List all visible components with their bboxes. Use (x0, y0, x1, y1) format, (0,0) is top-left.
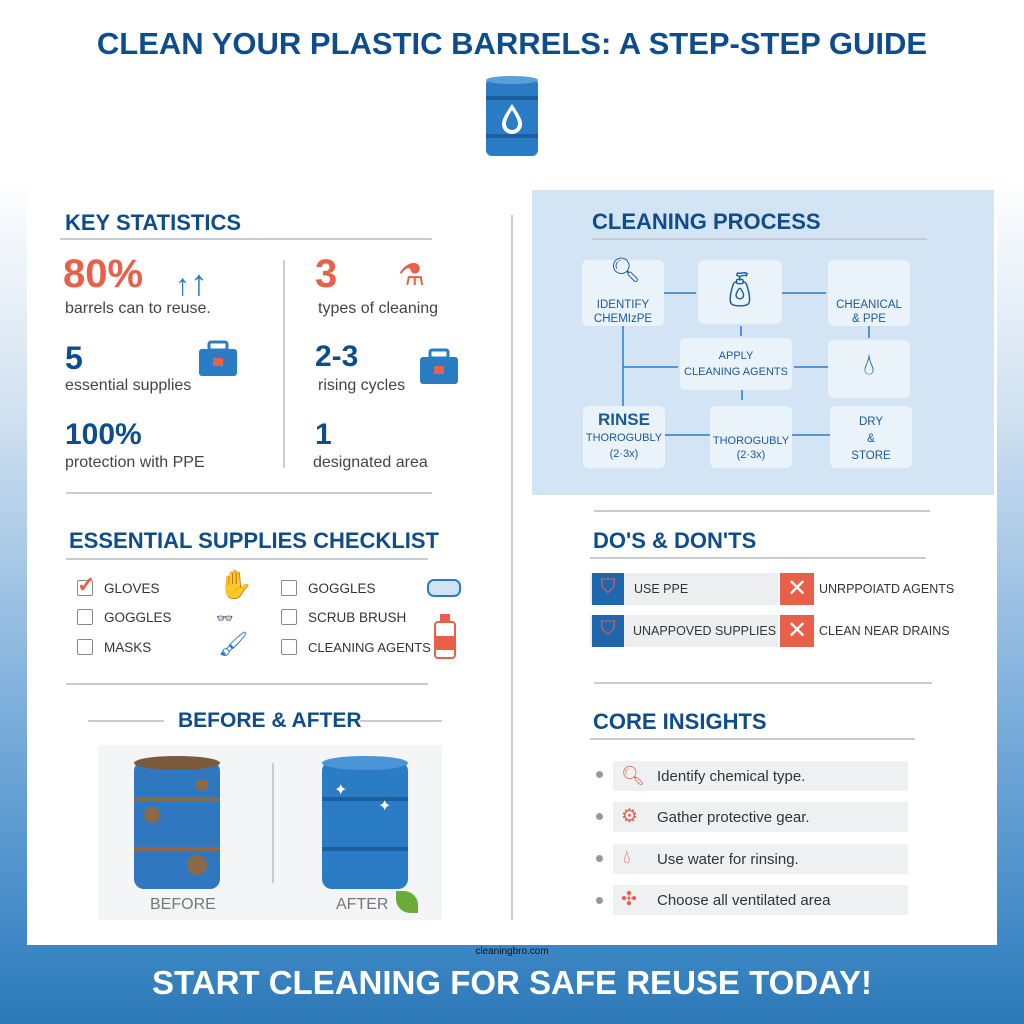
text: Use water for rinsing. (657, 851, 799, 868)
panel: key statistics (60, 210, 458, 471)
main card (27, 187, 997, 945)
panel: before & after (88, 709, 442, 920)
panel: cleaning process: CHEANICAL (836, 299, 902, 311)
panel: key statistics: 100% (65, 418, 142, 451)
icon: toolbox (199, 340, 237, 376)
panel: essential supplies checklist: SCRUB BRUSH (308, 610, 406, 625)
panel: essential supplies checklist: GLOVES (104, 581, 160, 596)
panel: cleaning process: DRY (859, 416, 883, 428)
panel: cleaning process: STORE (851, 450, 891, 462)
panel: before & after: ✦ (378, 798, 391, 815)
panel: cleaning process: 🧴︎ (718, 271, 762, 309)
panel: cleaning process: CLEANING PROCESS (592, 209, 821, 234)
panel: cleaning process: CLEANING AGENTS (684, 366, 788, 378)
panel: cleaning process: & PPE (852, 313, 886, 325)
panel: cleaning process: (2·3x) (610, 448, 638, 460)
panel: key statistics: 5 (65, 340, 83, 376)
text: ✣ (621, 889, 637, 910)
panel: cleaning process: THOROGUBLY (713, 435, 789, 447)
panel: key statistics: 1 (315, 418, 332, 451)
panel: cleaning process: THOROGUBLY (586, 432, 662, 444)
text: 💧︎ (623, 847, 631, 868)
arrows (622, 292, 870, 436)
panel: do's & don'ts: CLEAN NEAR DRAINS (819, 624, 950, 638)
panel: key statistics: ⚗ (398, 259, 425, 292)
panel: cleaning process: IDENTIFY (597, 299, 649, 311)
panel: cleaning process (582, 209, 927, 468)
panel: cleaning process: CHEMIzPE (594, 313, 652, 325)
panel: before & after: AFTER (336, 896, 388, 913)
panel: essential supplies checklist: GOGGLES (308, 581, 376, 596)
panel: essential supplies checklist: 👓 (216, 610, 233, 626)
panel: cleaning process: 🔍︎ (610, 257, 640, 284)
panel: cleaning process: & (867, 433, 875, 445)
text: Identify chemical type. (657, 768, 805, 785)
text: ⚙ (621, 806, 638, 827)
panel: key statistics: protection with PPE (65, 454, 205, 471)
panel: essential supplies checklist: GOGGLES (104, 610, 172, 625)
panel: essential supplies checklist: ✋ (218, 569, 253, 600)
panel: do's & don'ts: ⛉ (600, 576, 616, 598)
panel: do's & don'ts: UNAPPOVED SUPPLIES (633, 624, 776, 638)
panel: key statistics: KEY STATISTICS (65, 210, 241, 235)
panel: cleaning process: APPLY (719, 350, 753, 362)
panel: key statistics: 2-3 (315, 340, 358, 373)
panel: essential supplies checklist (66, 528, 461, 659)
panel: key statistics: designated area (313, 454, 428, 471)
panel: key statistics: types of cleaning (318, 300, 438, 317)
panel: do's & don'ts: UNRPPOIATD AGENTS (819, 582, 954, 596)
text: Choose all ventilated area (657, 892, 830, 909)
panel: do's & don'ts: ✕ (787, 575, 807, 602)
panel: do's & don'ts: ⛉ (600, 618, 616, 640)
title: CLEAN YOUR PLASTIC BARRELS: A STEP-STEP GUIDE (97, 26, 927, 61)
panel: essential supplies checklist: 🖌 (218, 631, 248, 658)
panel: cleaning process background (532, 190, 994, 495)
panel: key statistics: rising cycles (318, 377, 405, 394)
panel: cleaning process: (2·3x) (737, 449, 765, 461)
panel: essential supplies checklist: ESSENTIAL SUPPLIES CHECKLIST (69, 528, 439, 553)
panel: cleaning process: RINSE (598, 410, 650, 429)
text: Gather protective gear. (657, 809, 810, 826)
panel: key statistics: 3 (315, 252, 337, 296)
panel: before & after: BEFORE & AFTER (178, 709, 362, 732)
panel: do's & don'ts (590, 510, 954, 684)
panel: before & after: BEFORE (150, 896, 216, 913)
panel: do's & don'ts: USE PPE (634, 582, 688, 596)
footer url: cleaningbro.com (475, 946, 549, 957)
panel: do's & don'ts: ✕ (787, 617, 807, 644)
panel: key statistics: 80% (63, 252, 143, 296)
panel: key statistics: ↑↑ (175, 262, 208, 303)
panel: before & after: ✦ (334, 782, 347, 799)
panel: essential supplies checklist: CLEANING AGENTS (308, 640, 431, 655)
panel: essential supplies checklist: ✓ (77, 572, 95, 597)
panel: core insights: CORE INSIGHTS (593, 709, 767, 734)
footer call to action: START CLEANING FOR SAFE REUSE TODAY! (152, 964, 872, 1001)
vertical divider (511, 215, 513, 920)
text: 🔍︎ (621, 766, 645, 787)
icon: barrel (486, 76, 538, 156)
panel: key statistics: barrels can to reuse. (65, 300, 211, 317)
panel: essential supplies checklist: MASKS (104, 640, 151, 655)
panel: cleaning process: 💧︎ (863, 348, 875, 381)
panel: key statistics: essential supplies (65, 377, 191, 394)
panel: do's & don'ts: DO'S & DON'TS (593, 528, 756, 553)
